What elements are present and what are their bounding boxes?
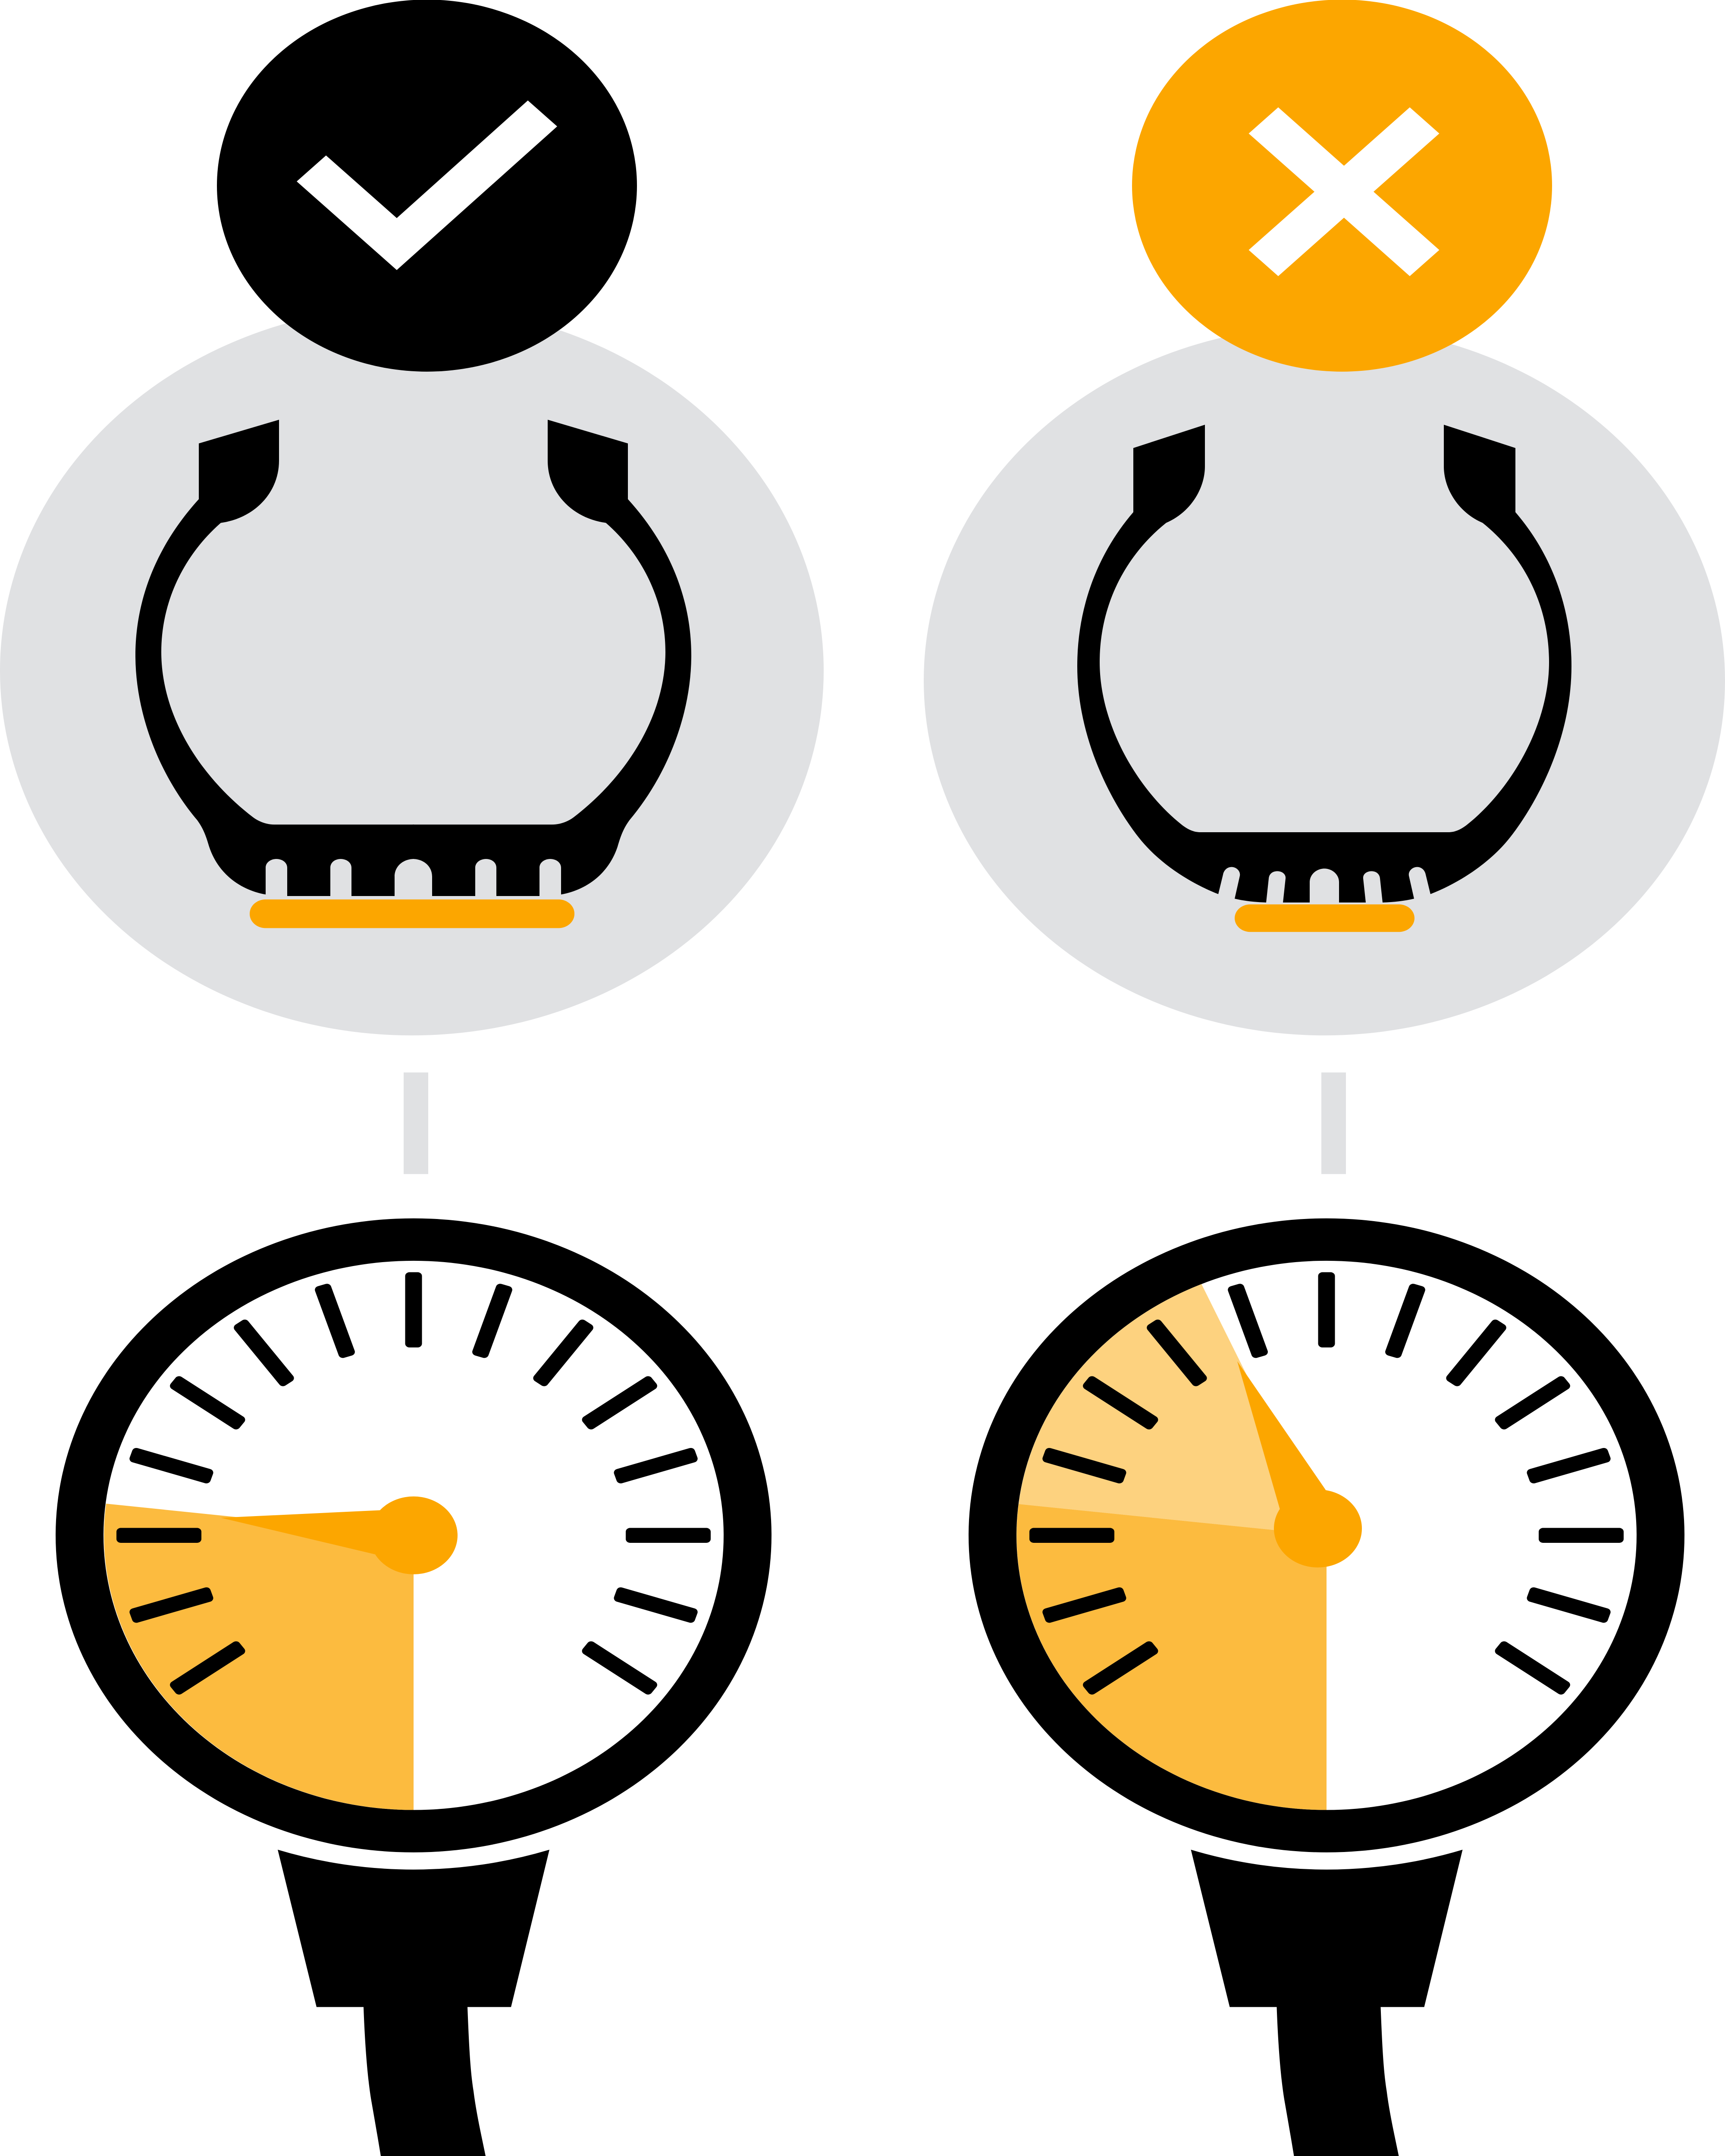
gauge stand (278, 1850, 549, 2156)
remaining pressure zone (1016, 1504, 1327, 1810)
pressure zone (104, 1504, 414, 1810)
tyre cross-section correct inflation (135, 420, 691, 896)
gauge ring (56, 1219, 772, 1852)
gauge correct pressure (56, 1219, 772, 1852)
tyre cross-section under inflation (1077, 425, 1571, 903)
gauge needle (221, 1496, 458, 1574)
gauge face (1016, 1261, 1637, 1810)
icon: black circle with check mark (217, 0, 637, 372)
connector left (404, 1072, 428, 1174)
road contact bar wide (250, 899, 574, 928)
gauge face (104, 1261, 724, 1810)
panel: low pressure tyre (924, 0, 1725, 2156)
gauge stand (1191, 1850, 1463, 2156)
connector right (1321, 1072, 1346, 1174)
gauge ticks (1029, 1272, 1624, 1696)
pressure drop zone (1019, 1284, 1327, 1536)
road contact bar narrow (1235, 904, 1414, 932)
gauge ring (969, 1219, 1684, 1852)
gauge ticks (116, 1272, 711, 1696)
icon: orange circle with cross (1132, 0, 1552, 372)
grey circle background left (0, 306, 824, 1035)
panel: correct pressure tyre (0, 0, 824, 2156)
grey circle background right (924, 326, 1725, 1035)
gauge low pressure (969, 1219, 1684, 1852)
gauge needle (1237, 1361, 1362, 1567)
